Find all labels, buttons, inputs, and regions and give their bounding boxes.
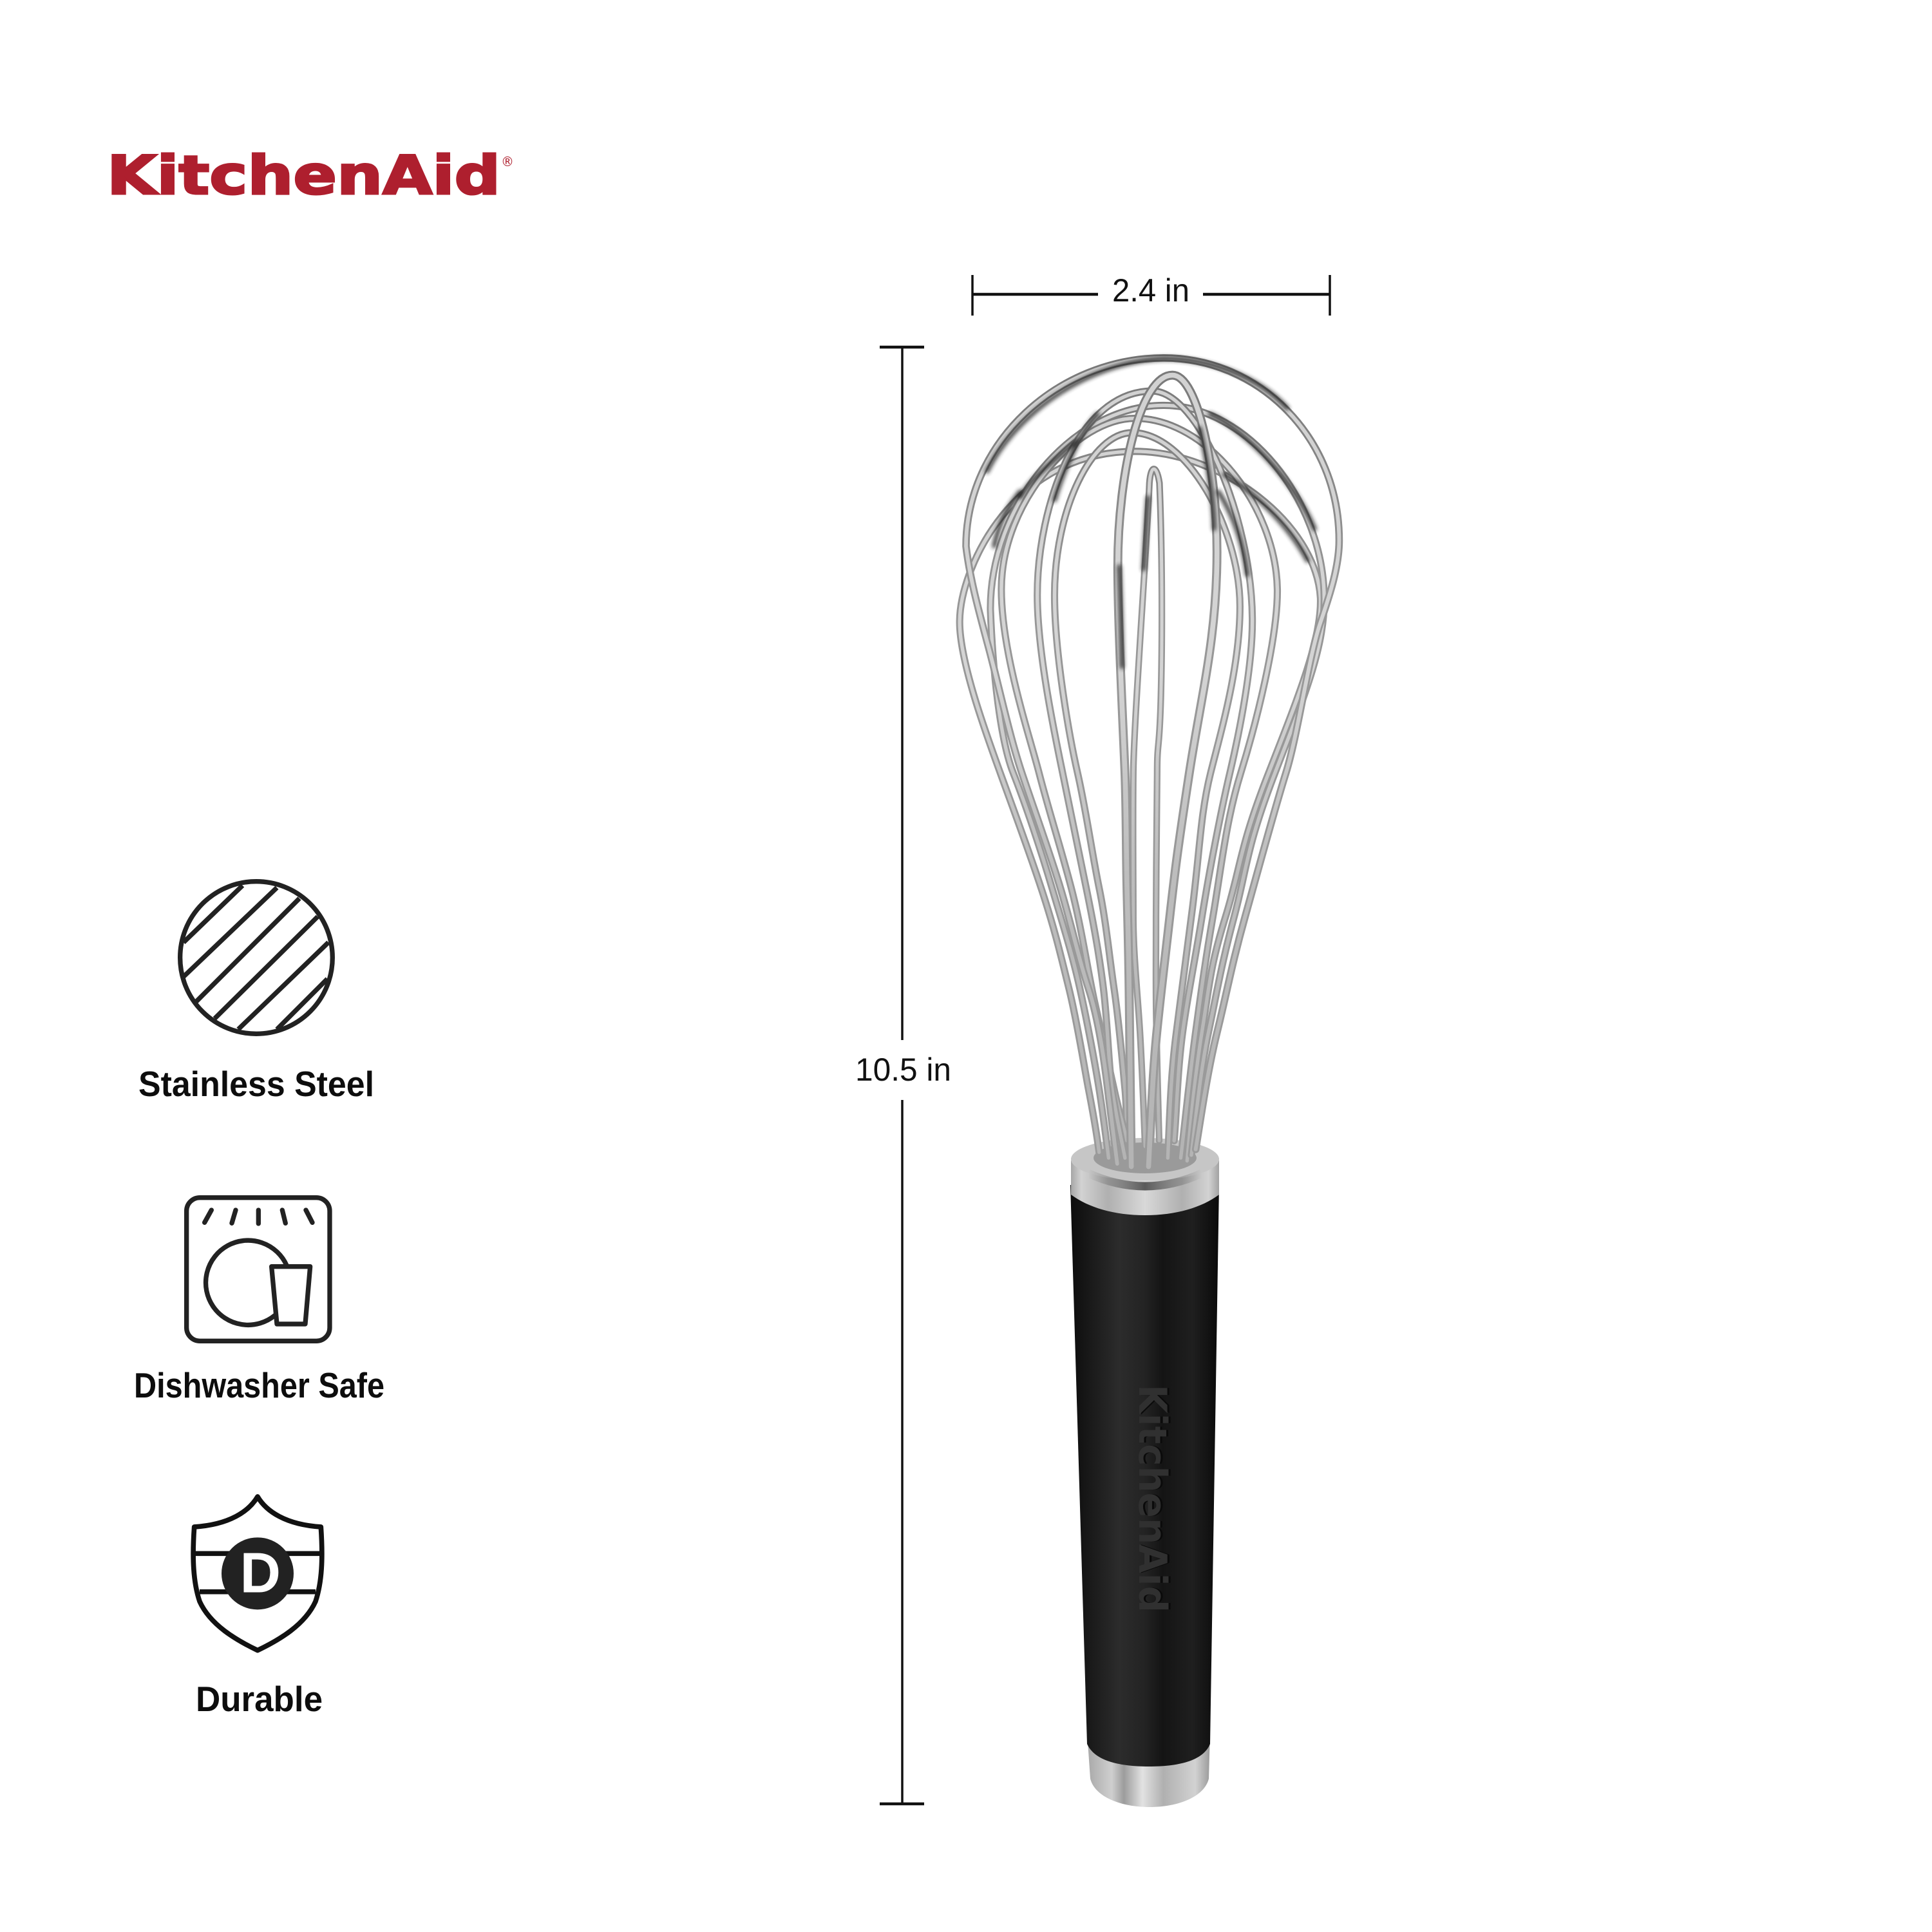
icon: dishwasher safe [187, 1198, 330, 1341]
icon: stainless steel hatched circle [180, 882, 332, 1034]
icon: durable shield: D [240, 1540, 281, 1604]
logo: KitchenAid: ® [501, 154, 514, 169]
whisk steel ferrule at handle base [1087, 1732, 1210, 1807]
height dimension: 10.5 in [855, 347, 951, 1804]
width dimension: 2.4 in: 2.4 in [1112, 272, 1189, 308]
label: Dishwasher Safe: Dishwasher Safe [134, 1365, 384, 1405]
whisk wires [960, 358, 1339, 1167]
label: Durable: Durable [196, 1679, 323, 1719]
width dimension: 2.4 in [972, 272, 1330, 316]
whisk collar [1071, 1138, 1219, 1215]
logo: KitchenAid: KitchenAid [107, 144, 500, 207]
icon: durable shield [193, 1497, 322, 1651]
height dimension: 10.5 in: 10.5 in [855, 1052, 951, 1088]
dark reflections on wires [987, 359, 1314, 667]
whisk [960, 358, 1339, 1807]
handle embossed logo: KitchenAid [1130, 1385, 1175, 1613]
whisk black handle [1070, 1185, 1219, 1766]
label: Stainless Steel: Stainless Steel [138, 1064, 374, 1104]
handle embossed logo: KitchenAid [1132, 1385, 1177, 1613]
